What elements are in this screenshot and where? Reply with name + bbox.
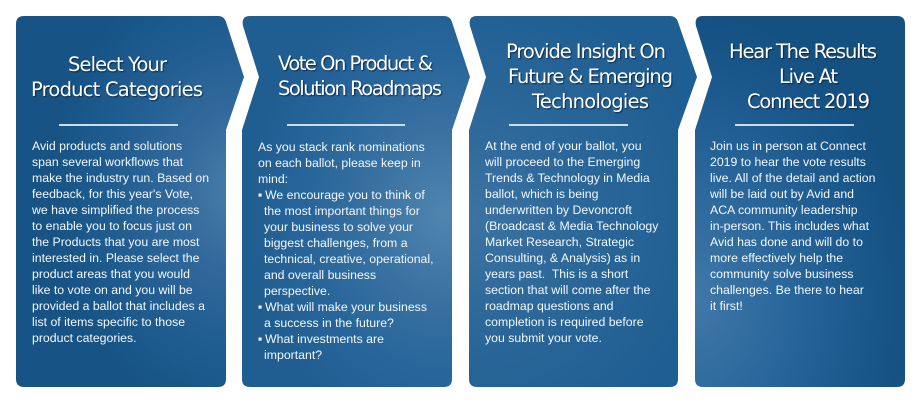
body text panel 3: ballot, which is being: [485, 187, 599, 201]
body text panel 1: we have simplified the process: [31, 203, 199, 217]
body text panel 4: ACA community leadership: [710, 203, 858, 217]
heading: select your product categories: Select Your: [68, 53, 168, 76]
body text panel 2: As you stack rank nominations: [258, 140, 425, 154]
body text panel 3: Consulting, & Analysis) as in: [485, 251, 640, 265]
body text panel 1: interested in. Please select the: [32, 251, 200, 265]
body text panel 4: Avid has done and will do to: [710, 235, 863, 249]
body text panel 3: At the end of your ballot, you: [485, 139, 642, 153]
body text panel 2: ▪: [258, 300, 262, 314]
body text panel 4: community solve business: [710, 267, 854, 281]
panel 2 background arrow: [242, 16, 470, 387]
panel 4 background arrow: [695, 16, 905, 387]
body text panel 1: like to vote on and you will be: [32, 283, 193, 297]
body text panel 2: We encourage you to think of: [265, 188, 425, 202]
body text panel 3: [484, 139, 659, 345]
heading: hear the results live at connect 2019: Hear The Results: [729, 40, 877, 63]
body text panel 3: Trends & Technology in Media: [485, 171, 650, 185]
heading: vote on product and solution roadmaps: [278, 52, 442, 100]
heading: hear the results live at connect 2019: [729, 40, 877, 113]
heading: provide insight on future and emerging technologies: [506, 40, 673, 113]
heading: provide insight on future and emerging technologies: Future & Emerging: [508, 65, 673, 88]
body text panel 4: [709, 139, 876, 313]
body text panel 2: ▪: [258, 188, 262, 202]
body text panel 2: [258, 140, 434, 362]
divider: [509, 124, 628, 126]
body text panel 3: (Broadcast & Media Technology: [485, 219, 659, 233]
panel: select your product categories: [16, 16, 244, 387]
panel 1 background arrow: [16, 16, 244, 387]
body text panel 3: completion is required before: [485, 315, 644, 329]
body text panel 2: technical, creative, operational,: [264, 252, 434, 266]
heading: provide insight on future and emerging technologies: Provide Insight On: [506, 40, 666, 63]
body text panel 3: you submit your vote.: [485, 331, 602, 345]
body text panel 3: years past. This is a short: [485, 267, 629, 281]
body text panel 3: underwritten by Devoncroft: [485, 203, 633, 217]
divider: [59, 124, 178, 126]
body text panel 2: a success in the future?: [264, 316, 394, 330]
body text panel 4: live. All of the detail and action: [710, 171, 876, 185]
body text panel 1: product categories.: [32, 331, 137, 345]
body text panel 1: to enable you to focus just on: [32, 219, 192, 233]
body text panel 2: What will make your business: [265, 300, 427, 314]
body text panel 1: provided a ballot that includes a: [32, 299, 205, 313]
body text panel 1: feedback, for this year's Vote,: [32, 187, 193, 201]
body text panel 2: biggest challenges, from a: [264, 236, 408, 250]
body text panel 2: your business to solve your: [264, 220, 413, 234]
heading: select your product categories: [31, 53, 203, 101]
heading: provide insight on future and emerging technologies: Technologies: [531, 90, 649, 113]
body text panel 2: important?: [264, 348, 322, 362]
body text panel 4: Join us in person at Connect: [710, 139, 866, 153]
body text panel 4: it first!: [710, 299, 743, 313]
body text panel 2: mind:: [258, 172, 288, 186]
body text panel 2: What investments are: [265, 332, 384, 346]
panel 3 background arrow: [469, 16, 697, 387]
heading: vote on product and solution roadmaps: Solution Roadmaps: [278, 77, 442, 100]
heading: select your product categories: Product Categories: [31, 78, 203, 101]
body text panel 3: roadmap questions and: [485, 299, 614, 313]
body text panel 1: product areas that you would: [32, 267, 190, 281]
body text panel 2: on each ballot, please keep in: [258, 156, 421, 170]
panel: hear the results live at connect 2019: [695, 16, 905, 387]
heading: hear the results live at connect 2019: Connect 2019: [747, 90, 870, 113]
divider: [735, 124, 854, 126]
body text panel 4: 2019 to hear the vote results: [710, 155, 866, 169]
heading: vote on product and solution roadmaps: Vote On Product &: [278, 52, 433, 75]
body text panel 2: perspective.: [264, 284, 330, 298]
body text panel 1: list of items specific to those: [32, 315, 185, 329]
body text panel 3: Market Research, Strategic: [485, 235, 634, 249]
body text panel 1: the Products that you are most: [32, 235, 200, 249]
body text panel 4: in-person. This includes what: [710, 219, 870, 233]
body text panel 2: the most important things for: [264, 204, 420, 218]
body text panel 4: challenges. Be there to hear: [710, 283, 864, 297]
body text panel 2: ▪: [258, 332, 262, 346]
heading: hear the results live at connect 2019: Live At: [779, 65, 838, 88]
body text panel 3: will proceed to the Emerging: [484, 155, 640, 169]
body text panel 1: Avid products and solutions: [32, 139, 182, 153]
body text panel 1: [31, 139, 209, 345]
body text panel 3: section that will come after the: [485, 283, 651, 297]
panel: provide insight on future and emerging technologies: [469, 16, 697, 387]
body text panel 2: and overall business: [264, 268, 376, 282]
body text panel 1: make the industry run. Based on: [32, 171, 209, 185]
panel: vote on product and solution roadmaps: [242, 16, 470, 387]
body text panel 4: more effectively help the: [710, 251, 843, 265]
divider: [287, 124, 405, 126]
body text panel 4: will be laid out by Avid and: [709, 187, 854, 201]
body text panel 1: span several workflows that: [32, 155, 184, 169]
